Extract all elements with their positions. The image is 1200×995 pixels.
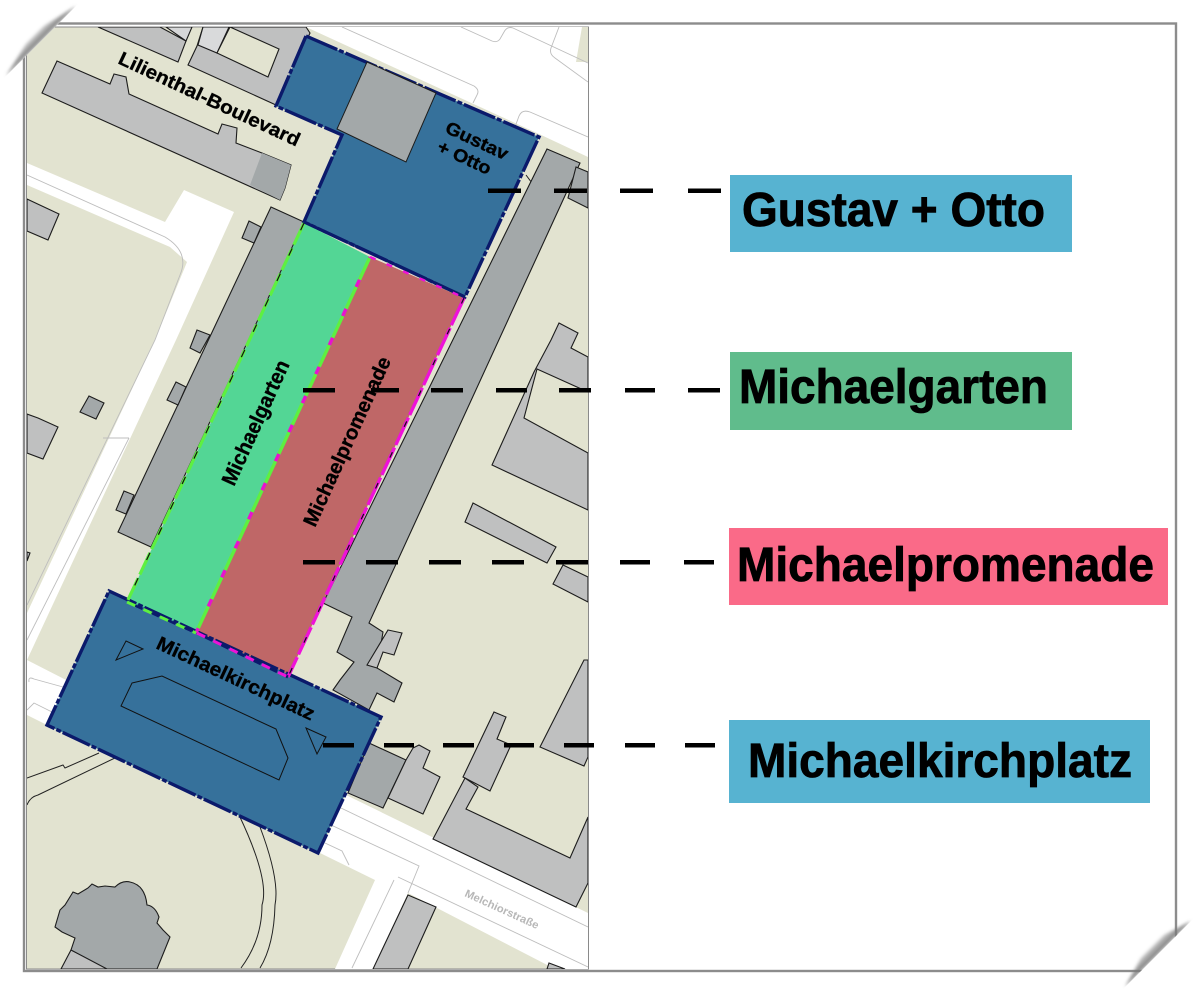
- page curl: top left: [6, 6, 75, 75]
- road label: Lilienthal-Boulevard: Lilienthal-Boulevard: [115, 48, 303, 151]
- zone: Michaelkirchplatz: [47, 591, 381, 853]
- leader line: Michaelkirchplatz: [323, 743, 715, 748]
- zone area: [47, 591, 381, 853]
- leader line: Michaelgarten: [303, 388, 720, 392]
- zone name line 1: Gustav: [442, 117, 511, 164]
- zone name line 2: + Otto: [434, 136, 494, 179]
- label box: Gustav + Otto: [730, 175, 1072, 252]
- top right lawn: [576, 27, 588, 62]
- long east block: [323, 149, 588, 710]
- zone area: [197, 257, 464, 677]
- zone: Michaelgarten: [127, 223, 370, 633]
- leader line: Michaelpromenade: [303, 560, 714, 564]
- existing building: [337, 62, 436, 162]
- page curl: bottom right: [1124, 920, 1190, 986]
- map frame: [26, 27, 588, 969]
- roads: [27, 27, 588, 969]
- zone area: [127, 223, 370, 633]
- map panel: [26, 27, 588, 969]
- zone name: Michaelpromenade: [300, 354, 396, 530]
- triangle east: [306, 728, 326, 754]
- zone: Michaelpromenade: [197, 257, 464, 677]
- church: [55, 882, 170, 969]
- triangle west: [116, 641, 143, 660]
- zone: Gustav + Otto: [276, 36, 539, 297]
- leader line: Gustav + Otto: [488, 188, 721, 193]
- label box: Michaelpromenade: Michaelpromenade: [737, 539, 1154, 592]
- label box: Michaelkirchplatz: Michaelkirchplatz: [748, 735, 1132, 788]
- zone name: Michaelkirchplatz: [153, 633, 318, 725]
- zone boundary accents: [127, 222, 465, 677]
- label box: Michaelpromenade: [729, 528, 1168, 605]
- park paths: [27, 167, 540, 968]
- buildings east: [348, 323, 588, 969]
- map contents: [27, 27, 588, 969]
- inner plaza outline: [121, 676, 288, 780]
- zone area: [276, 36, 539, 297]
- label box: Michaelgarten: [730, 352, 1072, 430]
- label box: Gustav + Otto: Gustav + Otto: [742, 184, 1045, 237]
- label box: Michaelkirchplatz: [729, 720, 1150, 803]
- buildings north west: [27, 27, 310, 561]
- road label: Melchiorstrasse: Melchiorstraße: [463, 888, 541, 932]
- road edge lines: [27, 27, 588, 968]
- zone name: Michaelgarten: [218, 357, 295, 489]
- label box: Michaelgarten: Michaelgarten: [739, 361, 1048, 414]
